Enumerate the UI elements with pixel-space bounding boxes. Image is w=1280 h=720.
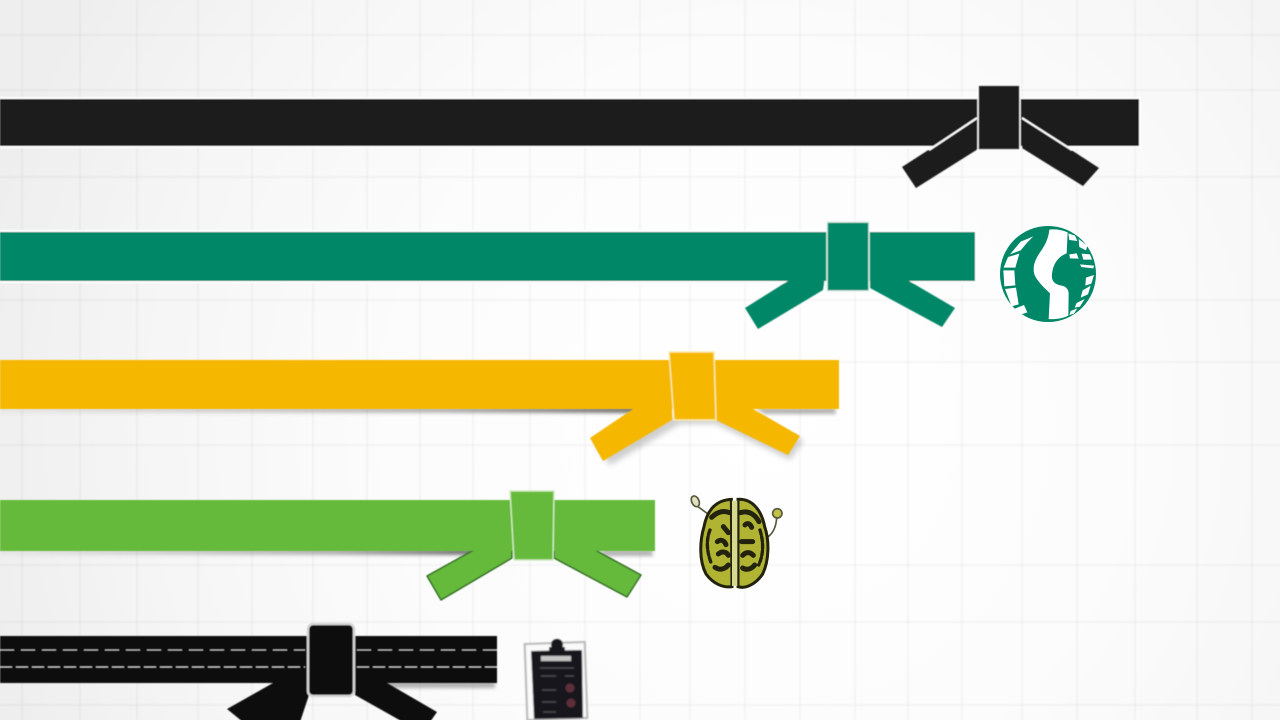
knot — [510, 491, 554, 560]
yellow belt — [0, 352, 839, 465]
icon: globe — [1000, 226, 1096, 322]
knot — [669, 352, 716, 420]
belt band — [0, 99, 1139, 146]
light green belt — [0, 491, 655, 600]
right tail — [355, 670, 437, 720]
right tail — [1022, 118, 1099, 186]
belt shadow — [0, 549, 478, 555]
right ocean cells — [1068, 233, 1077, 241]
left tail — [427, 540, 512, 600]
stitching — [0, 649, 497, 651]
right tail — [870, 270, 955, 327]
belt band — [0, 360, 839, 409]
left ocean cells — [1010, 236, 1033, 254]
black belt (top) — [0, 85, 1141, 188]
brain antennae — [690, 495, 782, 537]
icon: brain — [690, 495, 782, 587]
brain lobes — [701, 499, 732, 587]
left tail — [902, 118, 978, 188]
knot — [978, 85, 1020, 150]
ocean between continents — [1034, 229, 1069, 319]
knot — [827, 222, 869, 291]
left tail — [590, 400, 672, 461]
belt shadow — [385, 682, 495, 688]
emerald belt — [0, 222, 977, 329]
left tail — [745, 270, 826, 329]
belt shadow — [0, 407, 640, 413]
belt band — [0, 636, 497, 683]
right tail — [554, 540, 641, 597]
left tail — [227, 670, 309, 720]
knot — [308, 624, 354, 696]
right tail — [714, 400, 800, 455]
icon: clipboard — [525, 639, 587, 720]
belt band — [0, 232, 975, 281]
belt band — [0, 500, 655, 551]
black belt (bottom, stitched) — [0, 624, 497, 720]
brain folds — [707, 511, 763, 569]
